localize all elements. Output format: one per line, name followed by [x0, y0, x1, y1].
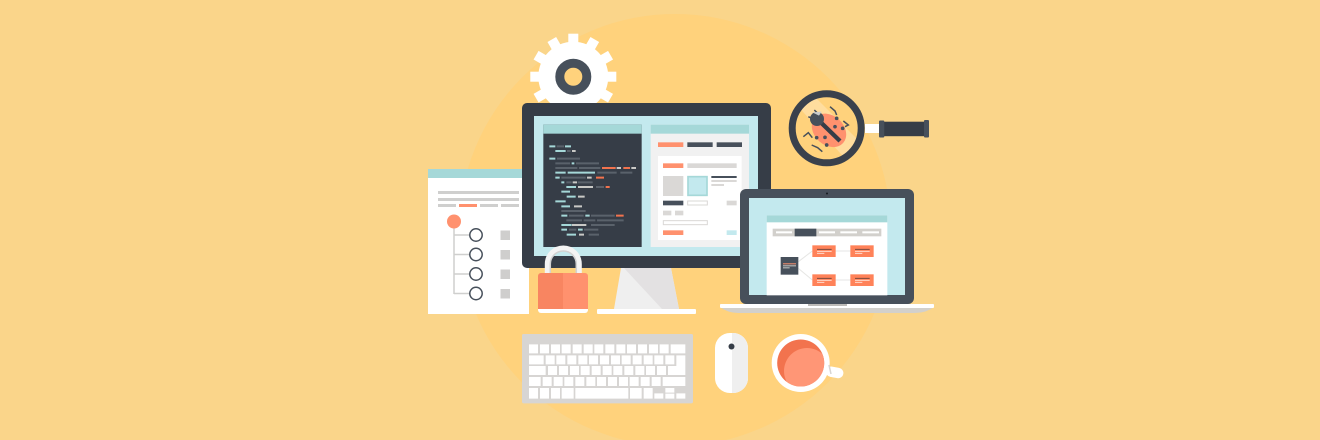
- icon: padlock: [538, 248, 588, 313]
- coffee cup: [772, 334, 844, 394]
- panel: code editor: [543, 125, 642, 247]
- monitor stand: [597, 268, 696, 314]
- panel: flowchart screen: [767, 215, 887, 295]
- background circle: [459, 14, 891, 440]
- mouse: [715, 333, 748, 393]
- icon: magnifying glass with bug: [792, 94, 929, 164]
- panel: web page layout: [651, 125, 749, 247]
- laptop: [720, 189, 934, 313]
- keyboard: [522, 334, 693, 403]
- icon: ladybug: [803, 107, 853, 154]
- icon: gear: [530, 34, 616, 120]
- desktop monitor: [522, 103, 771, 268]
- panel: document with tree diagram: [428, 169, 529, 314]
